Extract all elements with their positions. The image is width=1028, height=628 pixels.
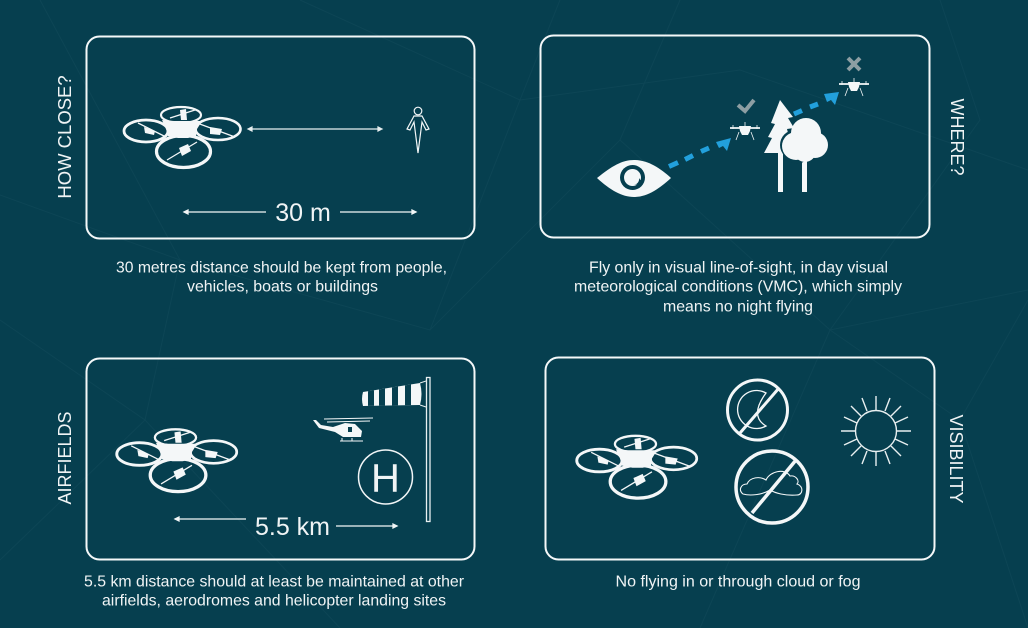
icon: no night: [728, 380, 788, 440]
icon: small drone ok: [730, 122, 760, 140]
icon: helicopter: [313, 418, 373, 441]
text block: airfields: 5.5 km distance should at least be maintained at other: [84, 574, 465, 590]
icon: sun: [841, 396, 911, 466]
text block: airfields: airfields, aerodromes and helicopter landing sites: [102, 592, 446, 610]
icon: drone: [577, 436, 697, 498]
icon: small drone too far: [839, 78, 869, 96]
heading: airfields: AIRFIELDS: [55, 411, 75, 505]
distance label: 5.5 km: [255, 513, 330, 541]
icon: helipad: H: [371, 456, 400, 500]
icon: helipad: [358, 450, 412, 504]
icon: drone: [117, 429, 237, 492]
heading: how close: HOW CLOSE?: [54, 75, 75, 199]
panel: how close: [86, 36, 474, 238]
icon: person: [407, 107, 429, 153]
distance label: [175, 513, 397, 541]
text block: where: meteorological conditions (VMC), which simply: [574, 278, 902, 296]
text block: where: Fly only in visual line-of-sight, in day visual: [589, 260, 888, 276]
arrow: drone to person distance: [248, 127, 382, 131]
text block: where: means no night flying: [663, 298, 813, 316]
icon: cross: [848, 58, 860, 70]
icon: eye: [597, 160, 671, 197]
heading: visibility: VISIBILITY: [946, 414, 966, 504]
panel: visibility: [546, 358, 934, 560]
text block: visibility: No flying in or through cloud or fog: [616, 574, 860, 590]
text block: how close: [116, 260, 447, 296]
heading: where: WHERE?: [947, 98, 967, 176]
arrow: beyond trees: [794, 92, 839, 114]
distance label: [184, 199, 416, 227]
panel: where: [540, 36, 930, 238]
text block: how close: 30 metres distance should be kept from people,: [116, 260, 447, 276]
icon: no cloud: [736, 451, 808, 523]
icon: check: [738, 100, 754, 111]
panel: airfields: [86, 358, 474, 560]
arrow: line of sight: [669, 138, 731, 166]
text block: how close: vehicles, boats or buildings: [187, 278, 378, 296]
distance label: 30 m: [275, 199, 331, 227]
text block: airfields: [84, 574, 465, 610]
icon: trees: [764, 100, 828, 192]
icon: drone: [124, 107, 240, 168]
text block: where: [574, 260, 902, 316]
icon: windsock: [362, 378, 430, 522]
